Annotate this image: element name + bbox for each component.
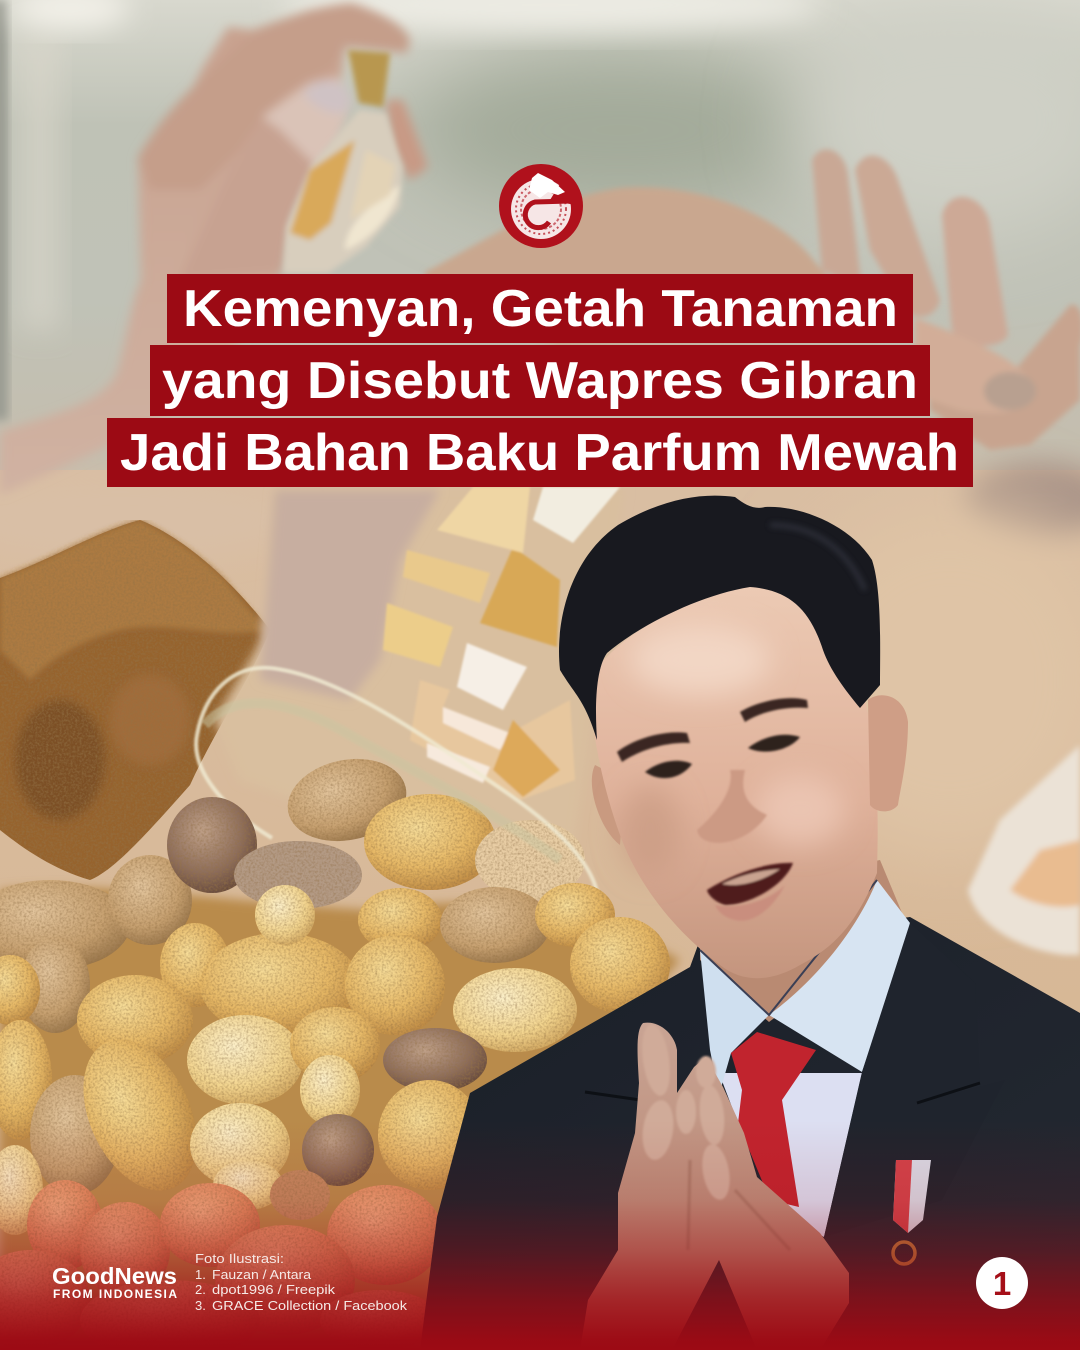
cork stopper: [0, 520, 270, 880]
photo credits: 3.: [195, 1298, 206, 1313]
bottom red gradient overlay: [0, 1120, 1080, 1350]
jacket: [420, 917, 1080, 1350]
facial features: [617, 698, 808, 921]
photo credits: Foto Ilustrasi:: [195, 1251, 284, 1266]
lapel pin: [893, 1160, 931, 1264]
glass jar with resin: [196, 487, 625, 905]
photo credits: dpot1996 / Freepik: [212, 1282, 336, 1297]
eyes: [645, 735, 800, 778]
photo credits: 1.: [195, 1267, 206, 1282]
mouth: [707, 863, 793, 905]
right collar: [769, 880, 910, 1072]
hand spraying perfume: [0, 3, 428, 495]
face highlights: [620, 625, 845, 875]
tie: [731, 1032, 816, 1207]
eyebrows: [617, 698, 808, 762]
lapels: [824, 923, 1005, 1237]
GoodNews from Indonesia brand mark: GoodNews: [52, 1263, 177, 1289]
left collar: [700, 950, 769, 1095]
open hand and arm at right: [425, 149, 1080, 450]
GoodNews from Indonesia brand mark: FROM INDONESIA: [53, 1287, 177, 1301]
right ear: [868, 695, 908, 811]
photo credits: 2.: [195, 1282, 206, 1297]
photo credits: [195, 1251, 408, 1313]
face: [590, 585, 878, 978]
pile of frankincense resin: [0, 797, 680, 1350]
shirt body: [719, 1073, 862, 1237]
title line 2: yang Disebut Wapres Gibran: [162, 352, 918, 410]
photo credits: Fauzan / Antara: [212, 1267, 312, 1282]
man in black suit: [420, 496, 1080, 1350]
nose shadow: [697, 770, 767, 843]
title line 1: Kemenyan, Getah Tanaman: [183, 280, 898, 338]
hands in namaste: [580, 1023, 849, 1350]
page number badge: 1: [993, 1265, 1011, 1302]
page number badge: [976, 1257, 1028, 1309]
GoodNews from Indonesia brand mark: [52, 1263, 177, 1301]
logo: red circle with white eagle G: [499, 164, 583, 248]
crystal at right: [968, 745, 1080, 955]
photo credits: GRACE Collection / Facebook: [212, 1298, 408, 1313]
neck: [700, 860, 905, 1022]
left ear: [592, 765, 625, 845]
resin pile shadow base: [0, 887, 680, 1350]
perfume bottle: [283, 50, 403, 273]
title line 3: Jadi Bahan Baku Parfum Mewah: [120, 424, 959, 482]
title: [107, 274, 973, 487]
hair: [559, 496, 880, 740]
